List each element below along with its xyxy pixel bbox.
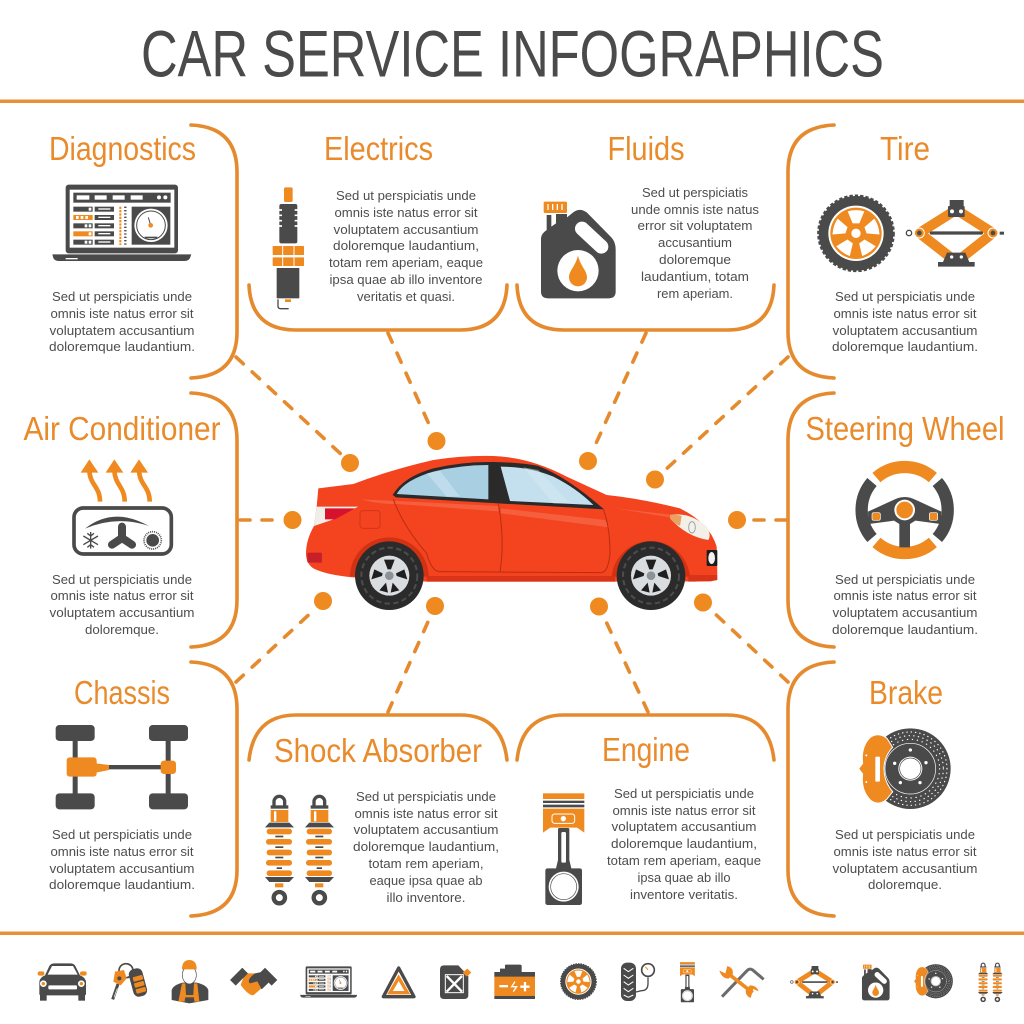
- body text: voluptatem accusantium: [832, 605, 978, 620]
- body text: omnis iste natus error sit: [834, 306, 977, 321]
- body text: Sed ut perspiciatis unde: [52, 289, 192, 304]
- body text: [832, 827, 978, 892]
- body text: unde omnis iste natus: [631, 202, 760, 217]
- body text: voluptatem accusantium: [50, 605, 194, 620]
- body text: [832, 289, 978, 354]
- icon: crossed wrenches: [719, 966, 764, 998]
- front wheel: [617, 541, 685, 610]
- icon: car keys: [113, 964, 148, 999]
- body text: veritatis et quasi.: [357, 289, 455, 304]
- body text: omnis iste natus error sit: [834, 844, 977, 859]
- panel: chassis: [49, 662, 237, 916]
- red sedan car: [306, 456, 717, 610]
- body text: omnis iste natus error sit: [834, 588, 977, 603]
- panel: steering wheel: [788, 393, 1004, 647]
- icon: chassis: [56, 725, 188, 809]
- body text: omnis iste natus error sit: [50, 844, 194, 859]
- icon: laptop small: [300, 966, 357, 998]
- body text: accusantium: [658, 235, 732, 250]
- panel: tire: [788, 125, 1004, 378]
- body text: voluptatem accusantium: [832, 861, 978, 876]
- icon: shocks small: [978, 963, 1003, 1001]
- rear wheel: [355, 541, 424, 610]
- icon: steering wheel: [862, 467, 948, 553]
- body text: Sed ut perspiciatis unde: [52, 572, 192, 587]
- icon: laptop: [52, 185, 191, 261]
- icon: brake disc: [859, 728, 951, 809]
- body text: Sed ut perspiciatis unde: [835, 289, 975, 304]
- body text: laudantium, totam: [641, 269, 749, 284]
- panel: engine: [517, 715, 774, 905]
- body text: Sed ut perspiciatis unde: [614, 786, 754, 801]
- body text: rem aperiam.: [657, 286, 733, 301]
- body text: [49, 289, 195, 354]
- icon: warning triangle: [383, 968, 414, 997]
- body text: omnis iste natus error sit: [334, 205, 478, 220]
- body text: [329, 188, 483, 304]
- panel: fluids: Fluids: [608, 130, 684, 167]
- icon: tire pressure gauge: [621, 963, 654, 1001]
- body text: [49, 827, 195, 892]
- body text: doloremque.: [85, 622, 159, 637]
- icon: wheel small: [561, 964, 596, 999]
- bottom icon row: [38, 960, 1003, 1003]
- panel: brake: Brake: [869, 674, 943, 711]
- panel: air conditioner: Air Conditioner: [24, 410, 220, 447]
- body text: doloremque laudantium.: [832, 339, 978, 354]
- panel: electrics: Electrics: [324, 130, 433, 167]
- body text: doloremque laudantium,: [333, 238, 479, 253]
- body text: illo inventore.: [386, 890, 466, 905]
- body text: error sit voluptatem: [638, 218, 752, 233]
- body text: doloremque.: [868, 877, 942, 892]
- body text: omnis iste natus error sit: [50, 588, 194, 603]
- body text: Sed ut perspiciatis unde: [336, 188, 476, 203]
- panel: fluids: [517, 130, 774, 330]
- body text: [832, 572, 978, 637]
- icon: spark plug: [273, 187, 304, 309]
- panel: diagnostics: [49, 125, 237, 378]
- dashed connectors: [236, 333, 788, 712]
- icon: jack small: [791, 966, 838, 998]
- body text: doloremque laudantium,: [611, 836, 757, 851]
- body text: omnis iste natus error sit: [612, 803, 756, 818]
- body text: doloremque laudantium,: [353, 839, 499, 854]
- panel: shock absorber: Shock Absorber: [274, 732, 482, 769]
- icon: oil small: [862, 965, 890, 1000]
- icon: mechanic: [172, 960, 208, 1003]
- icon: handshake: [230, 968, 277, 995]
- panel: electrics: [249, 130, 507, 330]
- icon: shock absorbers: [265, 796, 334, 903]
- icon: wheel: [818, 196, 894, 271]
- body text: voluptatem accusantium: [354, 822, 498, 837]
- body text: omnis iste natus error sit: [354, 806, 498, 821]
- icon: piston small: [680, 962, 695, 1002]
- body text: omnis iste natus error sit: [50, 306, 194, 321]
- body text: voluptatem accusantium: [612, 819, 756, 834]
- body text: voluptatem accusantium: [334, 222, 478, 237]
- panel: engine: Engine: [602, 731, 690, 768]
- body text: Sed ut perspiciatis unde: [356, 789, 496, 804]
- body text: totam rem aperiam,: [368, 856, 484, 871]
- body text: voluptatem accusantium: [832, 323, 978, 338]
- body text: Sed ut perspiciatis unde: [835, 827, 975, 842]
- icon: brake small: [914, 964, 953, 998]
- body text: eaque ipsa quae ab: [370, 873, 482, 888]
- panel: diagnostics: Diagnostics: [49, 130, 196, 167]
- body text: totam rem aperiam, eaque: [607, 853, 761, 868]
- body text: ipsa quae ab illo: [638, 870, 730, 885]
- panel: shock absorber: [249, 715, 507, 905]
- body text: Sed ut perspiciatis unde: [52, 827, 192, 842]
- icon: piston: [543, 793, 584, 905]
- body text: Sed ut perspiciatis: [642, 185, 748, 200]
- icon: jerrycan: [440, 965, 471, 999]
- panel: brake: [788, 662, 978, 916]
- body text: ipsa quae ab illo inventore: [330, 272, 482, 287]
- body text: voluptatem accusantium: [50, 861, 194, 876]
- body text: [50, 572, 194, 637]
- icon: scissor jack: [906, 200, 1004, 267]
- body text: doloremque: [659, 252, 731, 267]
- icon: battery: [494, 965, 535, 999]
- body text: doloremque laudantium.: [49, 339, 195, 354]
- icon: air conditioner: [74, 459, 171, 554]
- body text: [631, 185, 760, 301]
- icon: car front: [38, 963, 87, 1001]
- body text: [607, 786, 761, 902]
- body text: doloremque laudantium.: [832, 622, 978, 637]
- body text: voluptatem accusantium: [50, 323, 194, 338]
- panel: chassis: Chassis: [74, 674, 170, 711]
- panel: air conditioner: [24, 393, 237, 647]
- body text: inventore veritatis.: [630, 887, 738, 902]
- body text: Sed ut perspiciatis unde: [835, 572, 975, 587]
- body text: doloremque laudantium.: [49, 877, 195, 892]
- icon: oil canister: [541, 202, 616, 298]
- body text: totam rem aperiam, eaque: [329, 255, 483, 270]
- body text: [353, 789, 499, 905]
- panel: tire: Tire: [880, 130, 930, 167]
